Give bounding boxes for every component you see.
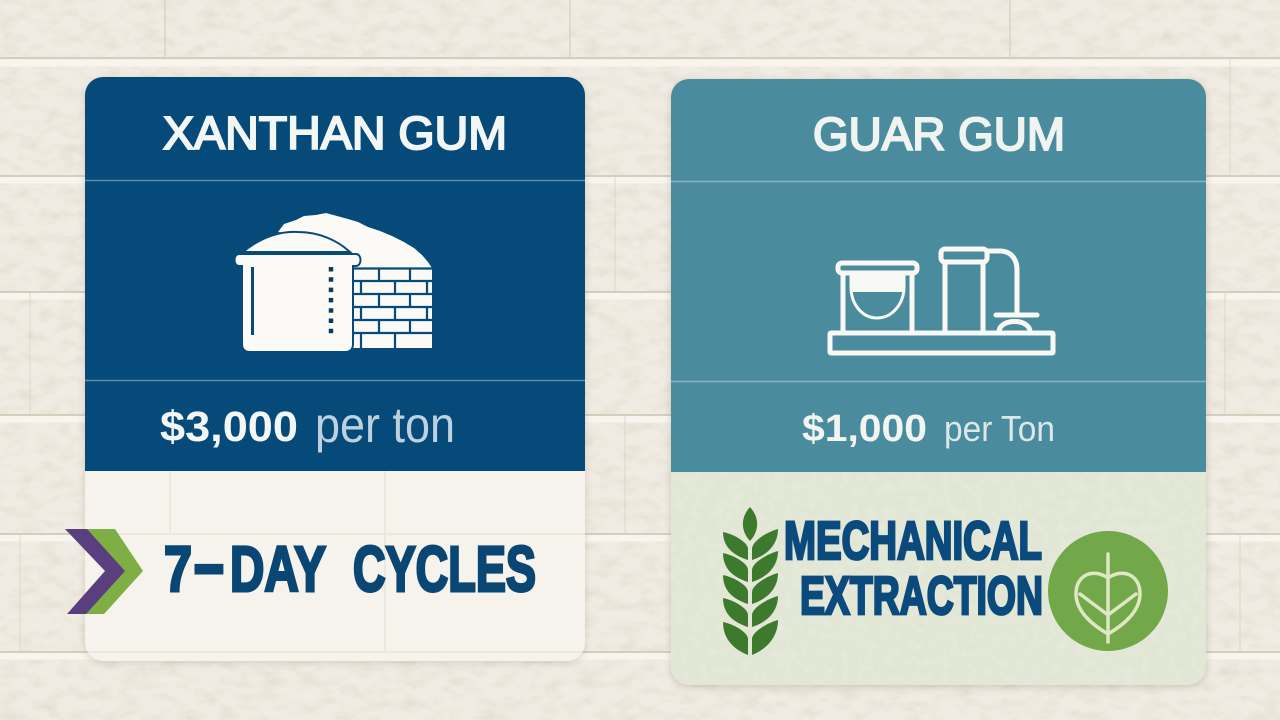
panel lower area: xanthan	[85, 77, 585, 661]
label: mechanical extraction: MECHANICAL	[784, 511, 1042, 571]
icon: chevron	[65, 529, 143, 614]
label: 7-day cycles	[164, 528, 536, 605]
card shadows	[85, 79, 585, 663]
panel: xanthan gum	[65, 77, 585, 661]
price: guar: per Ton	[944, 408, 1055, 449]
icon: extraction equipment	[830, 249, 1053, 353]
heading: guar gum: GUAR GUM	[813, 108, 1065, 160]
label: 7-day cycles: DAY	[230, 533, 326, 605]
label: mechanical extraction: EXTRACTION	[800, 566, 1043, 626]
icon: wheat	[723, 507, 778, 655]
price: guar: $1,000	[802, 408, 927, 450]
label: 7-day cycles: 7	[164, 533, 192, 605]
heading: xanthan gum: XANTHAN GUM	[163, 107, 507, 159]
label: 7-day cycles: -	[193, 528, 225, 600]
panel: guar gum	[671, 79, 1206, 685]
panel lower area: guar	[671, 79, 1206, 685]
label: mechanical extraction	[784, 511, 1043, 626]
price: guar	[802, 408, 1055, 450]
icon: storage tank and bricks	[234, 213, 432, 352]
price: xanthan: $3,000	[160, 403, 298, 451]
price: xanthan	[160, 397, 455, 453]
icon: leaf badge	[1048, 531, 1168, 651]
label: 7-day cycles: CYCLES	[353, 533, 536, 605]
price: xanthan: per ton	[315, 397, 455, 453]
